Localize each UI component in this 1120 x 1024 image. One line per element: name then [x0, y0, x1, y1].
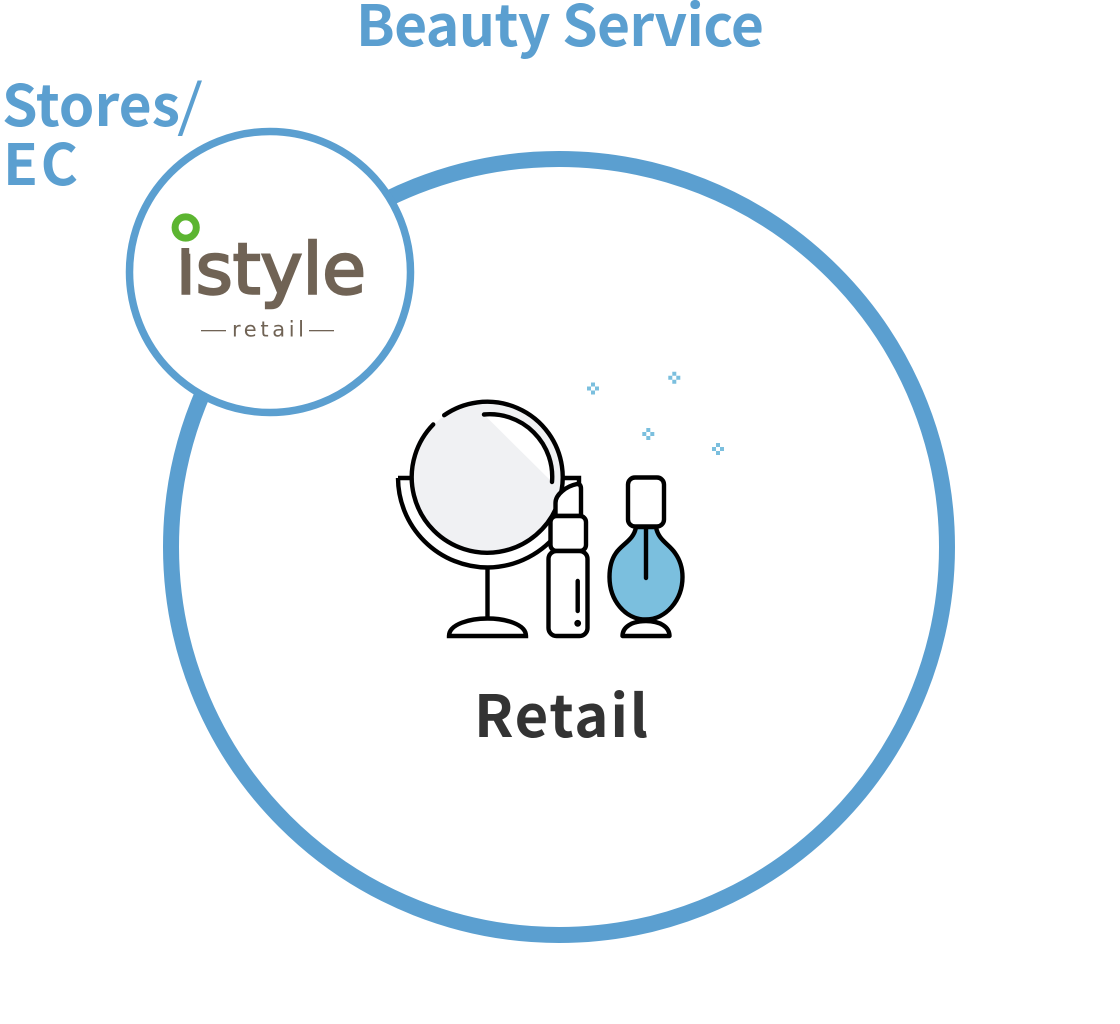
large circle: retail [171, 159, 947, 935]
icon: sparkles [587, 372, 724, 455]
label: Retail: Retail [474, 670, 648, 754]
icon: tabletop mirror [398, 402, 579, 636]
logo subtitle: retail: retail [232, 318, 304, 342]
icon: nail polish bottle [610, 478, 682, 636]
logo wordmark: istyle: istyle [176, 228, 366, 310]
logo dot: green ring [175, 217, 196, 238]
label: Stores/EC [2, 61, 203, 202]
label: Stores/EC: EC [3, 120, 78, 202]
label: Stores/EC: / [177, 61, 203, 143]
logo subtitle: retail [201, 318, 334, 342]
icon: lipstick [548, 484, 588, 636]
small circle: istyle retail logo [130, 132, 410, 412]
label: Stores/EC: Stores [2, 61, 180, 143]
